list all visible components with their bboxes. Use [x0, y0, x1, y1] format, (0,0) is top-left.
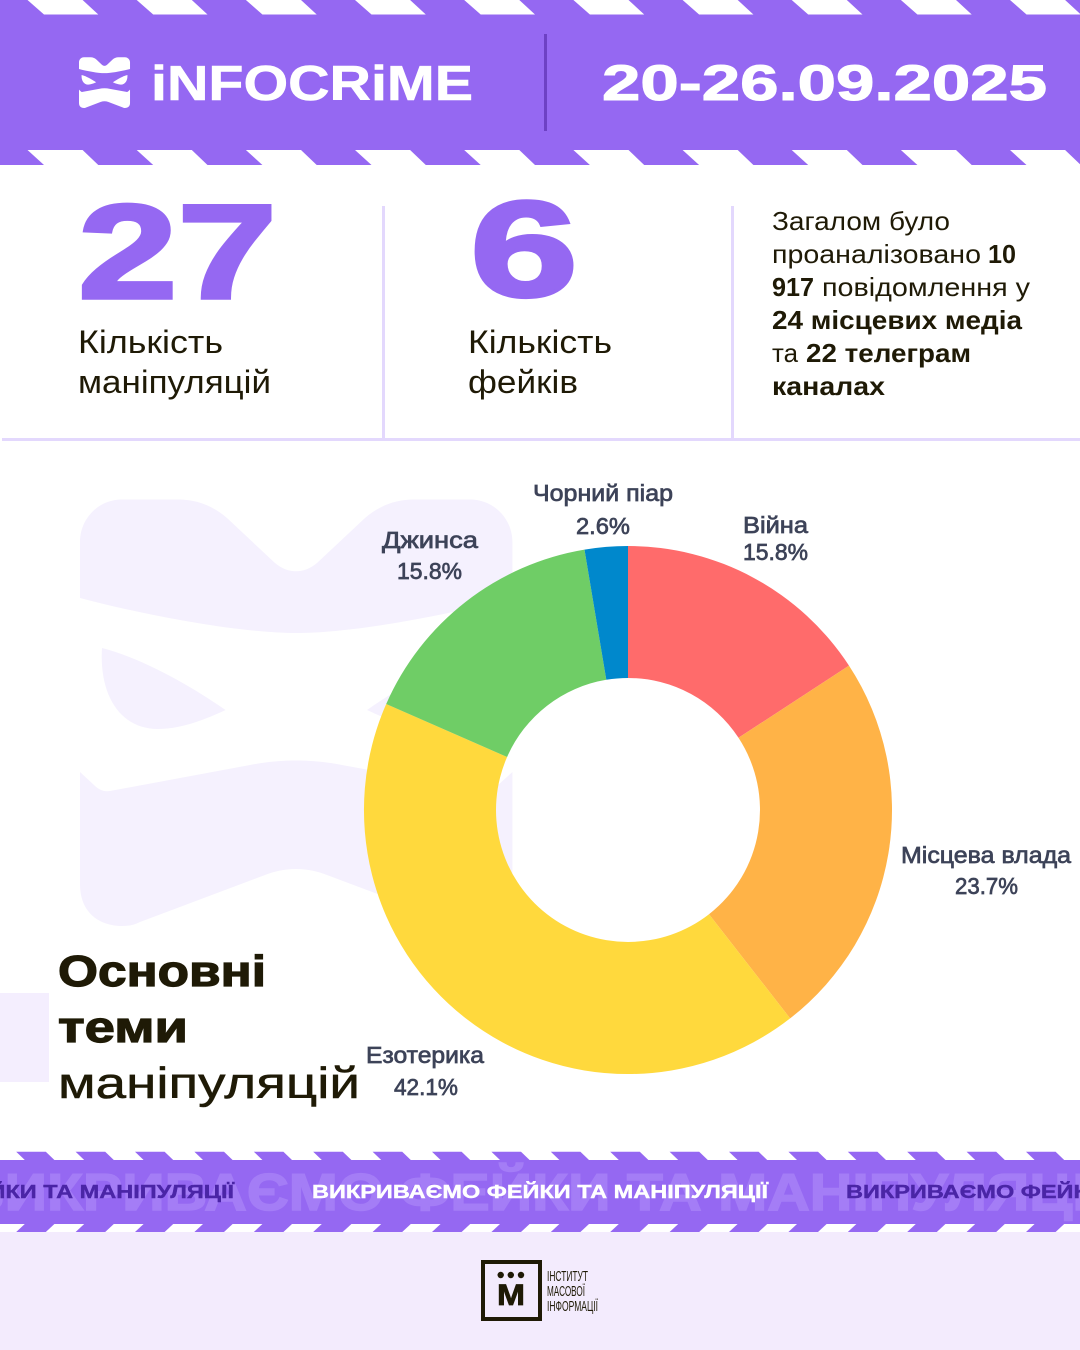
icon: infocrime logo mark [79, 57, 130, 108]
label: Езотерика: Езотерика [366, 1042, 484, 1068]
stat: fakes: фейків [468, 364, 578, 400]
heading: main topics of manipulations: Основні [58, 947, 266, 996]
institute name: ІНСТИТУТ [547, 1269, 588, 1285]
label: Чорний піар: Чорний піар [533, 480, 673, 506]
summary text block: 10 [988, 239, 1016, 269]
segment: Езотерика [364, 704, 790, 1074]
summary text block: 22 телеграм [806, 338, 971, 368]
institute name: МАСОВОЇ [547, 1283, 585, 1300]
footer ticker band [0, 1152, 1080, 1232]
heading: main topics of manipulations [58, 947, 360, 1108]
label: Чорний піар: 2.6% [576, 513, 630, 539]
ticker text white: ВИКРИВАЄМО ФЕЙКИ ТА МАНІПУЛЯЦІЇ [312, 1181, 769, 1202]
label: Джинса: Джинса [382, 527, 478, 553]
summary text block: 917 [772, 272, 814, 302]
segment: Джинса [386, 550, 606, 757]
label: Езотерика [366, 1042, 484, 1100]
stat: fakes: 6 [470, 173, 578, 325]
stat: manipulations [78, 178, 277, 400]
label: Місцева влада: Місцева влада [901, 842, 1071, 868]
stat: fakes [468, 173, 612, 400]
label: Війна: Війна [743, 512, 808, 538]
heading: main topics of manipulations: теми [58, 1003, 188, 1052]
summary text block: каналах [772, 371, 886, 401]
summary text block [772, 206, 1030, 401]
header banner [0, 0, 1080, 165]
summary text block: та [772, 338, 799, 368]
institute name [547, 1269, 598, 1315]
segment: Місцева влада [709, 666, 892, 1018]
logo: Institute of Mass Information [483, 1262, 598, 1319]
label: Війна: 15.8% [743, 539, 808, 565]
summary text block: 24 місцевих медіа [772, 305, 1023, 335]
date range: 20-26.09.2025 [602, 55, 1047, 111]
summary text block: проаналізовано [772, 239, 981, 269]
background logo watermark [80, 500, 512, 926]
label: Місцева влада [901, 842, 1071, 899]
summary text block: Загалом було [772, 206, 950, 236]
label: Езотерика: 42.1% [394, 1074, 458, 1100]
stat: manipulations: Кількість [78, 324, 223, 360]
segment: Чорний піар [584, 546, 628, 680]
label: Джинса: 15.8% [397, 558, 462, 584]
label: Джинса [382, 527, 478, 584]
brand name: iNFOCRiME [151, 57, 473, 111]
heading: main topics of manipulations: маніпуляцій [58, 1059, 360, 1108]
footer panel [0, 1232, 1080, 1350]
label: Війна [743, 512, 808, 565]
summary text block: повідомлення у [822, 272, 1030, 302]
stat: fakes: Кількість [468, 324, 612, 360]
label: Чорний піар [533, 480, 673, 539]
stat: manipulations: маніпуляцій [78, 364, 271, 400]
institute name: ІНФОРМАЦІЇ [547, 1298, 598, 1315]
icon: IMI square mark: М [497, 1279, 525, 1312]
label: Місцева влада: 23.7% [955, 873, 1018, 899]
donut chart: topics of manipulations [364, 546, 892, 1074]
stat: manipulations: 27 [78, 178, 277, 327]
segment: Війна [628, 546, 849, 738]
